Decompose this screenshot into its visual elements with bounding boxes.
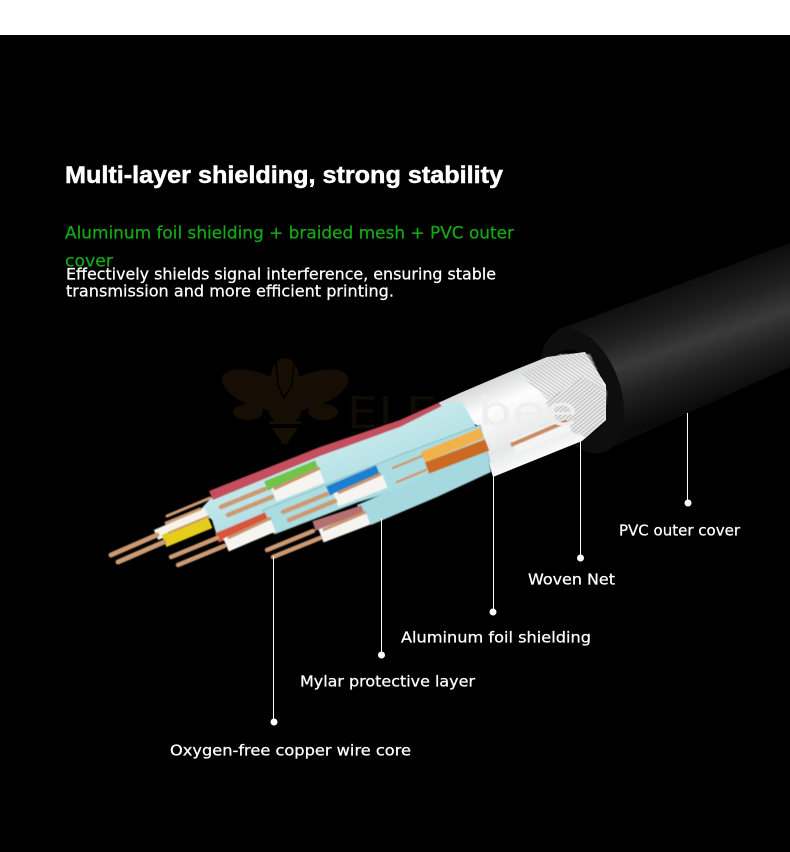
watermark: brand text: ELE bbox=[347, 388, 437, 439]
title: Multi-layer shielding, strong stability bbox=[65, 162, 504, 189]
wire pair: mauve and white bbox=[267, 510, 368, 557]
description: transmission and more efficient printing. bbox=[66, 282, 394, 300]
wire pair: red and white bbox=[171, 517, 273, 565]
green subtitle bbox=[65, 224, 514, 272]
leader line: aluminum foil bbox=[490, 476, 496, 616]
label: Aluminum foil shielding: Aluminum foil shielding bbox=[401, 628, 591, 646]
mylar bundle: top with red strip bbox=[200, 402, 484, 536]
leader line: mylar layer bbox=[378, 518, 385, 658]
description bbox=[66, 264, 496, 300]
exposed conductor in foil bbox=[511, 418, 572, 454]
leader line: PVC outer cover bbox=[684, 413, 692, 506]
green subtitle: cover bbox=[65, 252, 113, 272]
cable: aluminum foil sleeve and woven net bbox=[438, 352, 607, 477]
wire pair: yellow and white bbox=[111, 498, 210, 562]
label: PVC outer cover: PVC outer cover bbox=[619, 522, 741, 540]
watermark: bee logo bbox=[216, 358, 354, 444]
mylar bundle: bottom bbox=[357, 447, 491, 525]
leader line: woven net bbox=[577, 438, 584, 562]
label: Woven Net: Woven Net bbox=[528, 570, 615, 588]
bee watermark text on foil: bee bbox=[478, 389, 578, 435]
green subtitle: Aluminum foil shielding + braided mesh + PVC outer bbox=[65, 224, 514, 244]
description: Effectively shields signal interference, ensuring stable bbox=[66, 264, 496, 284]
top white band bbox=[0, 0, 790, 35]
cable conductors bundle bbox=[111, 402, 491, 565]
label: Mylar protective layer: Mylar protective layer bbox=[300, 672, 476, 690]
wire pair: green and white bbox=[221, 465, 322, 515]
label: Oxygen-free copper wire core: Oxygen-free copper wire core bbox=[170, 742, 411, 760]
leader line: copper wire core bbox=[270, 556, 278, 726]
cable: black PVC sheath bbox=[524, 243, 790, 465]
mylar bundle: middle bbox=[263, 425, 490, 534]
wire pair: yellow and orange bbox=[393, 433, 487, 482]
wire pair: blue and white bbox=[283, 470, 385, 520]
